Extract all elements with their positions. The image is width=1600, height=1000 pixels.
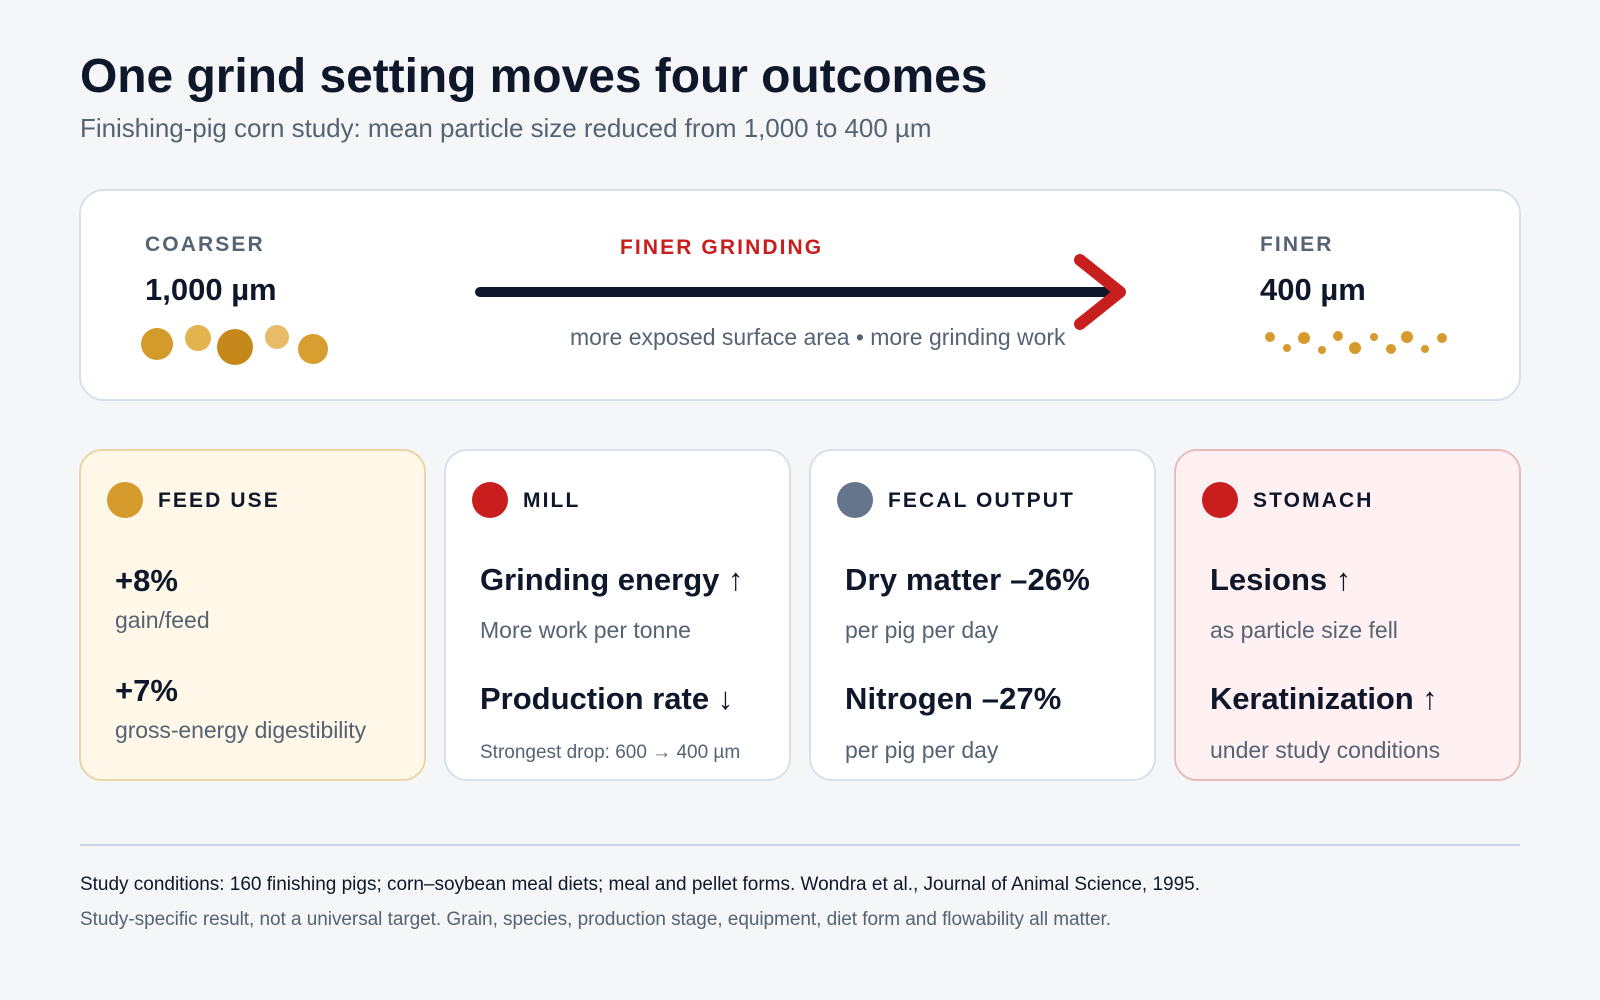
panel: feed use <box>79 449 426 781</box>
stat: lesions: Lesions ↑ <box>1210 562 1351 597</box>
note: grinding energy: More work per tonne <box>480 617 691 643</box>
fine particles <box>1265 331 1447 354</box>
stat: nitrogen: Nitrogen –27% <box>845 681 1061 716</box>
stat: production rate: Production rate ↓ <box>480 681 733 716</box>
arrow label: FINER GRINDING <box>620 236 823 259</box>
stat label: gain/feed: gain/feed <box>115 607 210 633</box>
stat label: digestibility: gross-energy digestibility <box>115 717 366 743</box>
coarser label: COARSER <box>145 233 265 256</box>
icon: feed use dot <box>107 482 143 518</box>
stat: dry matter: Dry matter –26% <box>845 562 1090 597</box>
heading: mill: MILL <box>523 489 580 512</box>
note: production rate: Strongest drop: 600 → 400 µm <box>480 742 740 763</box>
title: One grind setting moves four outcomes <box>80 50 987 103</box>
note: lesions: as particle size fell <box>1210 617 1398 643</box>
note: nitrogen: per pig per day <box>845 737 998 763</box>
footer: study conditions: Study conditions: 160 finishing pigs; corn–soybean meal diets; meal and pellet forms. Wondra et al., Journal of Animal Science, 1995. <box>80 874 1200 895</box>
panel: stomach <box>1174 449 1521 781</box>
arrow caption: more exposed surface area • more grinding work <box>570 324 1065 350</box>
icon: fecal output dot <box>837 482 873 518</box>
note: dry matter: per pig per day <box>845 617 998 643</box>
coarser size value: 1,000 µm <box>145 272 277 307</box>
heading: feed use: FEED USE <box>158 489 280 512</box>
heading: fecal output: FECAL OUTPUT <box>888 489 1075 512</box>
panel: fecal output <box>809 449 1156 781</box>
footer: caveat: Study-specific result, not a universal target. Grain, species, production stage, equipment, diet form and flowability all matter. <box>80 909 1111 930</box>
icon: mill dot <box>472 482 508 518</box>
panel: mill <box>444 449 791 781</box>
panel: grind scale <box>79 189 1521 401</box>
stat: grinding energy: Grinding energy ↑ <box>480 562 744 597</box>
heading: stomach: STOMACH <box>1253 489 1373 512</box>
subtitle: Finishing-pig corn study: mean particle size reduced from 1,000 to 400 µm <box>80 113 931 143</box>
icon: stomach dot <box>1202 482 1238 518</box>
finer label: FINER <box>1260 233 1334 256</box>
stat: digestibility: +7% <box>115 673 178 708</box>
stat: keratinization: Keratinization ↑ <box>1210 681 1437 716</box>
coarse particles <box>141 325 328 365</box>
arrow: finer grinding <box>475 254 1126 330</box>
finer size value: 400 µm <box>1260 272 1366 307</box>
note: keratinization: under study conditions <box>1210 737 1440 763</box>
stat: gain/feed: +8% <box>115 563 178 598</box>
